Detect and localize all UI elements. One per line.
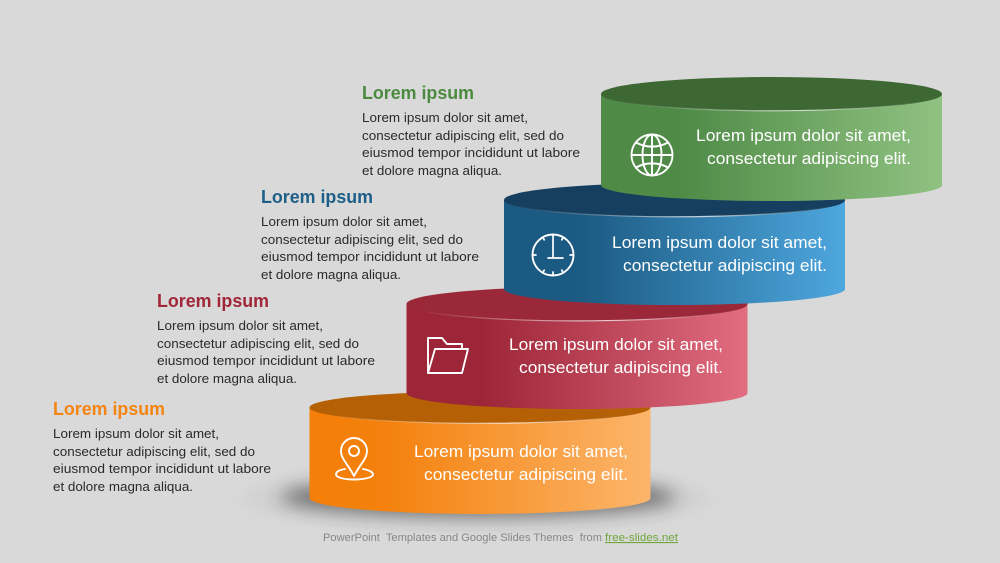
orange heading: Lorem ipsum: [53, 398, 165, 419]
text block: orange: [53, 398, 271, 494]
green heading: Lorem ipsum: [362, 82, 474, 103]
text block: blue: [261, 186, 479, 282]
orange cylinder top: [310, 392, 650, 424]
red body text: et dolore magna aliqua.: [157, 371, 297, 386]
blue body text: [261, 214, 479, 282]
blue cylinder text: [612, 234, 827, 275]
blue cylinder top: [504, 183, 845, 217]
orange body text: et dolore magna aliqua.: [53, 479, 193, 494]
footer credit: PowerPoint Templates and Google Slides Themes from: [323, 532, 602, 544]
orange body text: [53, 426, 271, 494]
red cylinder text: consectetur adipiscing elit.: [519, 359, 723, 377]
text block: red: [157, 290, 375, 386]
orange body text: Lorem ipsum dolor sit amet,: [53, 426, 219, 441]
red heading: Lorem ipsum: [157, 290, 269, 311]
green cylinder text: consectetur adipiscing elit.: [707, 150, 911, 168]
blue heading: Lorem ipsum: [261, 186, 373, 207]
orange cylinder text: consectetur adipiscing elit.: [424, 466, 628, 484]
icon: folder: [428, 338, 468, 373]
green body text: Lorem ipsum dolor sit amet,: [362, 110, 528, 125]
green body text: [362, 110, 580, 178]
red cylinder top: [406, 287, 748, 321]
cylinder: blue: [504, 183, 845, 305]
red cylinder text: [509, 336, 723, 377]
icon: globe: [632, 134, 672, 176]
red body text: consectetur adipiscing elit, sed do: [157, 336, 359, 351]
blue cylinder body: [504, 200, 845, 305]
red cylinder text: Lorem ipsum dolor sit amet,: [509, 336, 723, 354]
orange cylinder body: [310, 408, 650, 514]
green body text: et dolore magna aliqua.: [362, 163, 502, 178]
green cylinder top: [601, 77, 942, 111]
orange cylinder text: Lorem ipsum dolor sit amet,: [414, 443, 628, 461]
red body text: Lorem ipsum dolor sit amet,: [157, 318, 323, 333]
blue cylinder text: Lorem ipsum dolor sit amet,: [612, 234, 827, 252]
red body text: eiusmod tempor incididunt ut labore: [157, 353, 375, 368]
orange body text: consectetur adipiscing elit, sed do: [53, 444, 255, 459]
icon: clock: [532, 234, 574, 276]
floor shadow: [240, 472, 712, 526]
text block: green: [362, 82, 580, 178]
cylinder: orange: [310, 392, 650, 514]
icon: map pin: [336, 438, 373, 480]
orange body text: eiusmod tempor incididunt ut labore: [53, 461, 271, 476]
green cylinder text: [696, 127, 911, 168]
blue body text: Lorem ipsum dolor sit amet,: [261, 214, 427, 229]
blue body text: eiusmod tempor incididunt ut labore: [261, 249, 479, 264]
footer credit: free-slides.net: [605, 532, 678, 544]
green cylinder body: [601, 94, 942, 201]
blue body text: consectetur adipiscing elit, sed do: [261, 232, 463, 247]
red cylinder body: [406, 304, 748, 409]
green body text: consectetur adipiscing elit, sed do: [362, 128, 564, 143]
orange cylinder text: [414, 443, 628, 484]
cylinder: red: [406, 287, 748, 409]
green body text: eiusmod tempor incididunt ut labore: [362, 145, 580, 160]
blue body text: et dolore magna aliqua.: [261, 267, 401, 282]
blue cylinder text: consectetur adipiscing elit.: [623, 257, 827, 275]
red body text: [157, 318, 375, 386]
cylinder: green: [601, 77, 942, 201]
green cylinder text: Lorem ipsum dolor sit amet,: [696, 127, 911, 145]
